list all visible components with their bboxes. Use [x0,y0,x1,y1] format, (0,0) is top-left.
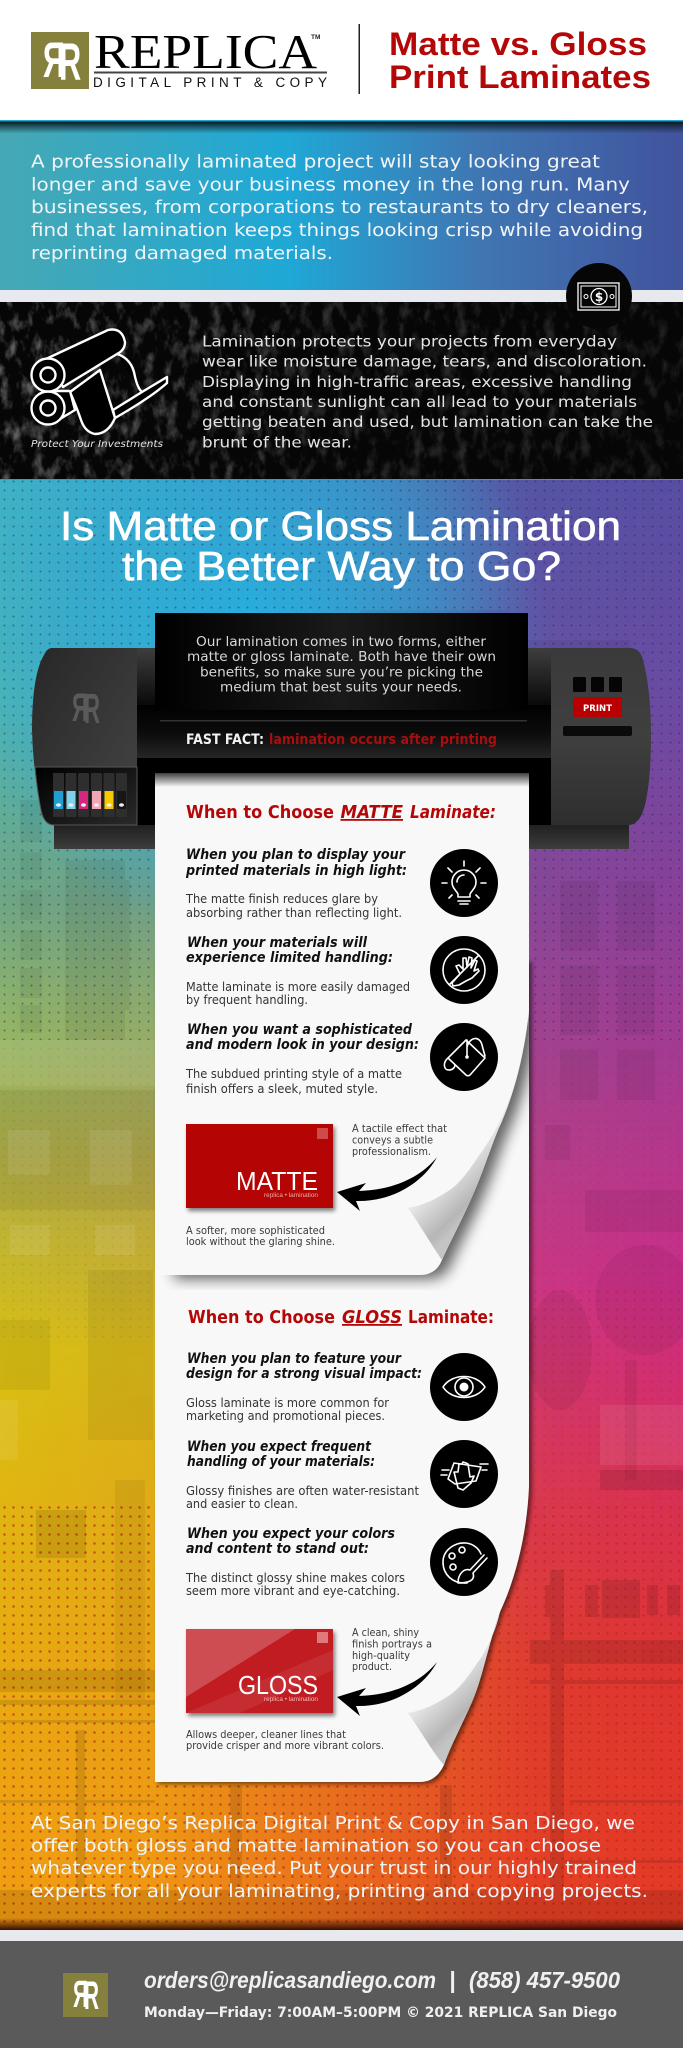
logo mark: R [43,31,65,88]
printer base [54,825,629,849]
gloss item 2: Glossy finishes are often water-resistant [186,1483,419,1498]
card logo [317,1632,328,1643]
gloss item 2: handling of your materials: [187,1454,375,1470]
gloss item 3: and content to stand out: [186,1541,369,1557]
footer logo: R [84,1973,99,2018]
gloss sample card [186,1629,335,1716]
fast fact: FAST FACT: [186,732,264,748]
heading line 1: Is Matte or Gloss Lamination [60,503,621,549]
card logo [317,1128,328,1139]
logo mark [31,31,89,92]
protection text [202,332,653,451]
contact line [144,1967,620,1993]
gloss caption [186,1728,384,1752]
gloss caption: Allows deeper, cleaner lines that [186,1728,347,1741]
matte item 3: The subdued printing style of a matte [185,1066,402,1081]
footer logo: R [73,1974,88,2016]
panel text: Our lamination comes in two forms, either [196,634,486,650]
gloss item 2: and easier to clean. [186,1496,298,1511]
gloss heading [188,1307,494,1328]
card subtitle: replica • lamination [264,1193,318,1199]
print button [573,697,622,717]
gloss item 3: The distinct glossy shine makes colors [185,1570,405,1585]
cartridge: yellow [104,773,114,817]
intro text [31,152,648,264]
gloss note: A clean, shiny [352,1626,419,1639]
matte item 2 [186,935,410,1007]
intro text: longer and save your business money in the long run. Many [31,174,630,195]
matte sample card [186,1124,335,1211]
icon: eye [430,1353,498,1421]
fast fact [186,732,497,748]
logo [31,24,327,92]
protection text: and constant sunlight can all lead to your materials [202,393,637,411]
title [389,26,651,95]
gloss item 3: When you expect your colors [187,1526,395,1542]
gloss item 1: Gloss laminate is more common for [186,1395,390,1410]
footer logo [63,1973,108,2018]
gloss item 3 [185,1526,405,1598]
matte note: professionalism. [352,1145,431,1158]
heading line 2: the Better Way to Go? [122,543,561,589]
gloss heading: Laminate: [408,1307,494,1328]
protection text: Displaying in high-traffic areas, excessive handling [202,373,632,391]
matte item 1: When you plan to display your [186,847,406,863]
icon: paint bucket [430,1023,498,1091]
matte heading [186,802,496,823]
card title: GLOSS [238,1670,318,1700]
header divider [358,24,360,94]
control buttons [573,677,622,692]
matte item 1: absorbing rather than reflecting light. [186,905,402,920]
card subtitle: replica • lamination [264,1697,318,1703]
logo mark: R [59,34,81,92]
protection text: brunt of the wear. [202,433,352,451]
icon: money coin: $ [595,290,603,304]
cartridge: magenta [78,773,89,817]
gloss note: finish portrays a [352,1638,432,1650]
hours line: Monday—Friday: 7:00AM–5:00PM © 2021 REPLICA San Diego [144,2005,617,2021]
gloss item 2 [186,1439,419,1511]
matte item 1 [185,847,407,920]
gloss item 1: design for a strong visual impact: [186,1366,422,1382]
contact line: | [449,1967,455,1993]
matte item 1: The matte finish reduces glare by [185,891,379,906]
icon caption: Protect Your Investments [31,439,163,450]
icon: wiping hand [430,1440,498,1508]
matte item 3 [185,1022,419,1096]
matte item 2: Matte laminate is more easily damaged [186,979,410,994]
icon: no handling [430,936,498,1004]
matte item 2: by frequent handling. [186,992,308,1007]
logo wordmark: REPLICA [94,24,318,79]
matte caption: A softer, more sophisticated [186,1224,325,1237]
gloss note: product. [352,1660,392,1673]
closing text: offer both gloss and matte lamination so you can choose [31,1836,601,1856]
main heading [60,503,621,589]
gloss item 1 [186,1351,422,1423]
header [31,24,651,95]
matte item 1: printed materials in high light: [185,863,407,879]
printer RR logo: R [84,687,100,733]
matte item 3: When you want a sophisticated [187,1022,413,1038]
printer center [137,648,551,825]
panel: protect your investments [0,263,683,480]
print button: PRINT [583,704,612,714]
printer RR logo: R [72,685,88,730]
matte item 2: experience limited handling: [186,950,393,966]
contact line: (858) 457-9500 [469,1967,620,1993]
light divider band [0,290,683,302]
printer right body [551,648,651,825]
panel: matte [185,802,498,1248]
ink cartridge bay [35,767,137,825]
icon: laminate rollers [32,330,167,434]
contact line: orders@replicasandiego.com [144,1967,436,1993]
gloss sheet [155,960,529,1782]
title line 1: Matte vs. Gloss [389,26,647,62]
matte heading: Laminate: [410,802,496,823]
matte sheet shadow [174,1014,538,1279]
output slot [563,726,632,736]
arrow: gloss note to card [337,1662,437,1716]
closing text [31,1813,648,1902]
gloss item 1: marketing and promotional pieces. [186,1408,385,1423]
closing text: experts for all your laminating, printing and copying projects. [31,1881,648,1902]
matte note: A tactile effect that [352,1122,448,1135]
gloss item 2: When you expect frequent [187,1439,372,1455]
icon: light bulb [430,849,498,917]
logo rule [94,72,327,74]
matte caption [186,1224,335,1248]
panel text: matte or gloss laminate. Both have their own [187,649,496,665]
arrow: matte note to card [337,1157,437,1211]
paper sheets [155,773,538,1784]
matte heading: When to Choose [186,802,334,823]
fast fact: lamination occurs after printing [269,732,497,748]
cartridge: cyan [53,773,64,817]
panel: gloss [185,1307,498,1752]
protection text: Lamination protects your projects from everyday [202,332,617,350]
trademark: TM [311,34,320,41]
closing text: whatever type you need. Put your trust in our highly trained [31,1858,637,1879]
gloss note: high-quality [352,1649,410,1662]
gloss heading: GLOSS [342,1307,402,1328]
intro text: A professionally laminated project will stay looking great [31,152,600,172]
colorful background [0,480,683,1930]
protection text: wear like moisture damage, tears, and discoloration. [202,353,647,371]
gloss item 3: seem more vibrant and eye-catching. [186,1583,400,1598]
icon: money coin [566,263,632,329]
panel text [187,634,496,696]
closing text: At San Diego’s Replica Digital Print & Copy in San Diego, we [31,1813,635,1834]
icon: palette [430,1528,498,1596]
logo tagline: DIGITAL PRINT & COPY [93,75,327,90]
panel text: medium that best suits your needs. [220,680,462,696]
printer seam [160,720,527,722]
cartridge: light cyan [66,773,76,817]
footer [0,1941,683,2048]
intro text: reprinting damaged materials. [31,243,333,264]
printer top panel [155,613,528,710]
card title: MATTE [236,1166,318,1196]
paper top shadow [155,773,529,787]
printer RR logo [72,685,100,733]
printer left body [32,648,137,825]
white header background [0,0,683,120]
intro text: businesses, from corporations to restaurants to dry cleaners, [31,197,648,218]
matte item 3: and modern look in your design: [186,1037,419,1053]
gloss note [352,1626,432,1673]
matte item 3: finish offers a sleek, muted style. [186,1081,378,1096]
panel text: benefits, so make sure you’re picking the [200,664,483,680]
cartridge: black [116,773,127,817]
matte page curl [408,1010,529,1260]
matte note [352,1122,448,1158]
gloss sheet shadow [158,962,532,1784]
light divider band [0,1930,683,1941]
matte item 2: When your materials will [187,935,368,951]
background building texture [0,610,683,1930]
gloss heading: When to Choose [188,1307,335,1328]
protection text: getting beaten and used, but lamination can take the [202,413,653,431]
intro text: find that lamination keeps things looking crisp while avoiding [31,220,643,241]
panel: intro [0,120,683,290]
gloss page curl [408,1612,500,1765]
cartridge: light magenta [91,773,102,817]
matte heading: MATTE [340,802,404,823]
matte sheet [155,773,529,1275]
title line 2: Print Laminates [389,59,651,95]
matte note: conveys a subtle [352,1134,433,1146]
printer [32,613,651,849]
gloss item 1: When you plan to feature your [187,1351,402,1367]
gloss caption: provide crisper and more vibrant colors. [186,1739,384,1752]
matte caption: look without the glaring shine. [186,1235,335,1248]
